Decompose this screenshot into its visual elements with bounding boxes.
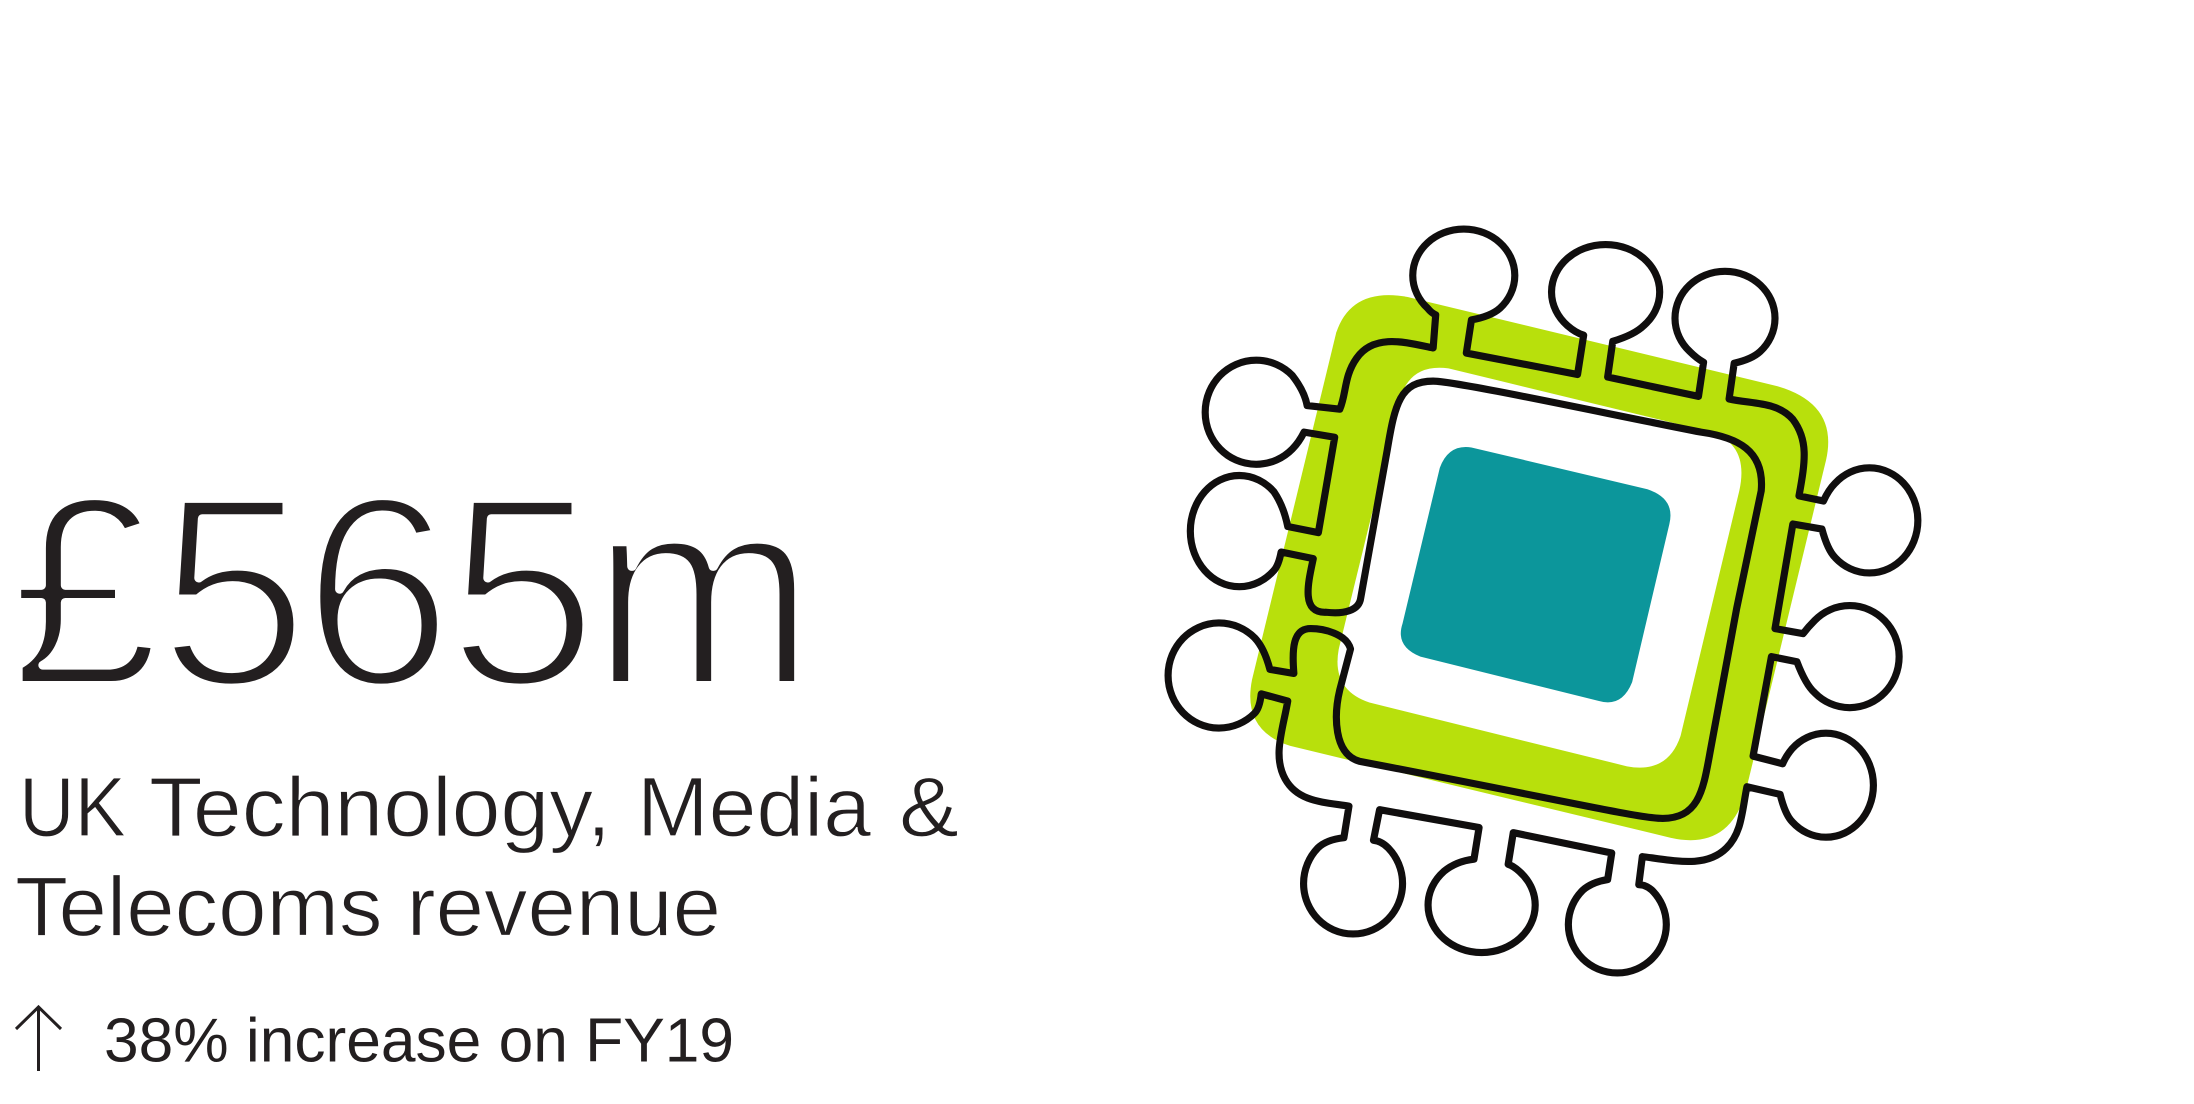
heading: revenue description: Technology, bbox=[149, 760, 611, 854]
heading: revenue description: Telecoms revenue bbox=[15, 860, 721, 954]
growth statistic: 38% increase on FY19 bbox=[104, 1006, 734, 1076]
chip lime background bbox=[1250, 295, 1828, 840]
heading: revenue description: UK bbox=[19, 760, 126, 854]
icon: microchip bbox=[1168, 229, 1918, 973]
chip white inner panel bbox=[1337, 368, 1741, 768]
heading: revenue description bbox=[15, 760, 959, 954]
chip teal core bbox=[1401, 447, 1670, 702]
icon: up arrow bbox=[16, 1007, 61, 1071]
heading: revenue description: & bbox=[899, 760, 959, 854]
heading: revenue description: Media bbox=[637, 760, 871, 854]
chip outline with connector pads bbox=[1168, 229, 1918, 973]
big number: £565m: £565m bbox=[9, 440, 817, 744]
